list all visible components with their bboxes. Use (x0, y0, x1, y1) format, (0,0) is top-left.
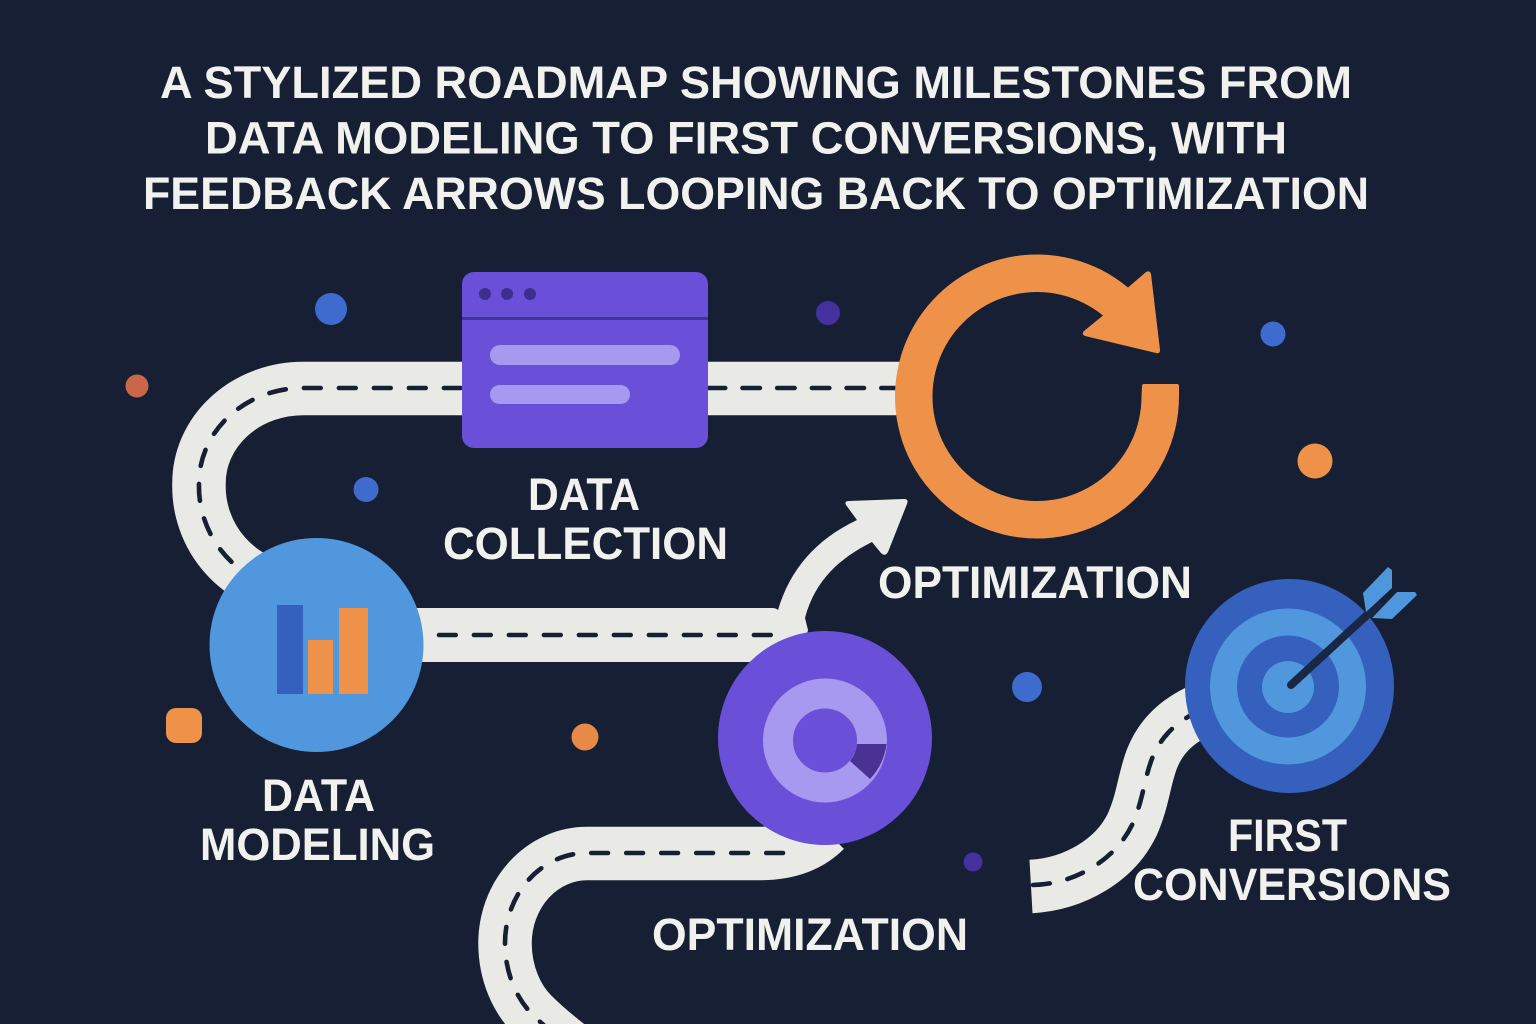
label: data modeling: MODELING (200, 819, 435, 870)
label: data collection: DATA (528, 469, 640, 520)
icon: first conversions target (1185, 567, 1417, 793)
icon: optimization donut circle (718, 631, 932, 845)
decorative dots (126, 293, 1332, 872)
label: optimization upper: OPTIMIZATION (878, 557, 1192, 608)
title: FEEDBACK ARROWS LOOPING BACK TO OPTIMIZATION (143, 168, 1369, 219)
road: data modeling to optimization (199, 388, 920, 590)
icon: data collection browser window (462, 272, 708, 448)
title (143, 57, 1369, 219)
label: first conversions: CONVERSIONS (1133, 859, 1451, 910)
road: lower optimization (505, 830, 825, 1024)
label: data collection: COLLECTION (443, 518, 728, 569)
title: DATA MODELING TO FIRST CONVERSIONS, WITH (205, 112, 1287, 164)
label: optimization lower: OPTIMIZATION (652, 909, 968, 960)
label: data collection (443, 469, 728, 569)
label: data modeling (200, 770, 435, 870)
road: first conversions (1031, 708, 1205, 886)
icon: optimization cycle arrow (895, 255, 1179, 539)
title: A STYLIZED ROADMAP SHOWING MILESTONES FROM (160, 57, 1352, 108)
label: first conversions: FIRST (1228, 810, 1347, 861)
road with arrow: data modeling toward optimization (400, 499, 908, 662)
label: first conversions (1133, 810, 1451, 910)
icon: data modeling circle (210, 538, 424, 752)
label: data modeling: DATA (262, 770, 375, 821)
